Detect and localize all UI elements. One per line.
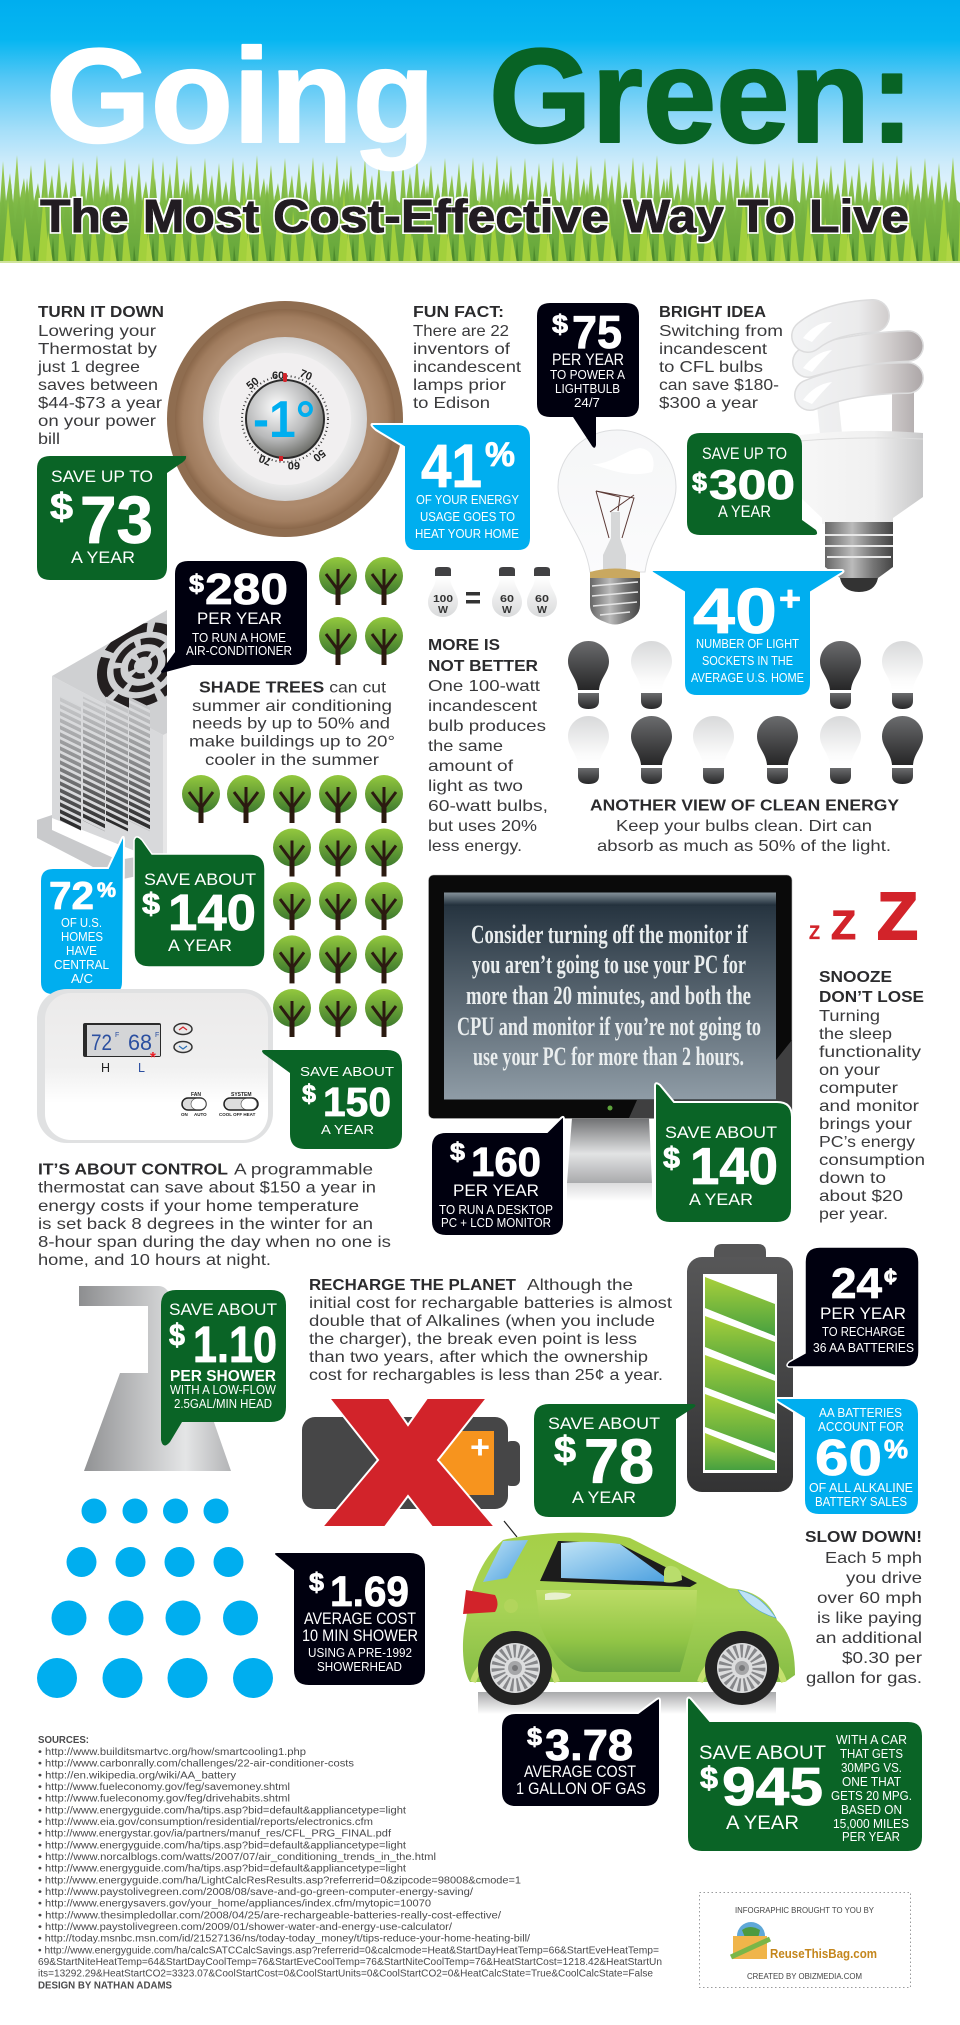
callout: $1.69 average cost of 10 min shower: AVERAGE COST	[304, 1610, 416, 1628]
panel: more is not better: MORE IS	[428, 637, 500, 654]
icon: shower water drops	[37, 1498, 273, 1698]
callout: 72% of US homes have central AC: HAVE	[66, 944, 97, 958]
callout: save about $945: A YEAR	[726, 1813, 799, 1834]
callout: save about $150: 150	[323, 1079, 391, 1125]
icon: programmable wall thermostat	[37, 989, 273, 1143]
callout: 72% of US homes have central AC: A/C	[71, 972, 93, 986]
fan grille	[97, 622, 167, 708]
panel: slow down: SLOW DOWN!	[805, 1529, 922, 1546]
logo: reuse this bag: ReuseThisBag.com	[770, 1946, 877, 1961]
callout: save up to $300: 300	[709, 461, 795, 508]
callout: $160 per year for desktop: TO RUN A DESKTOP	[439, 1203, 553, 1217]
panel: snooze don't lose: down to	[819, 1170, 886, 1187]
car comparison note: ONE THAT	[842, 1775, 901, 1789]
thermostat display	[83, 1023, 161, 1075]
callout: $1.69 average cost of 10 min shower	[275, 1553, 425, 1685]
panel: snooze don't lose: computer	[819, 1080, 899, 1097]
callout: 40+ light sockets: SOCKETS IN THE	[702, 654, 793, 668]
callout: 24 cents per year	[787, 1247, 919, 1367]
panel: more is not better: One 100-watt	[428, 678, 541, 695]
callout: 24 cents per year: 24	[831, 1260, 882, 1308]
callout: $3.78 average cost of gas	[501, 1698, 660, 1807]
callout: $75 per year per lightbulb: $	[552, 309, 569, 339]
panel: it's about control: home, and 10 hours at night.	[38, 1252, 271, 1269]
panel: recharge the planet: RECHARGE THE PLANET	[309, 1277, 517, 1294]
panel: snooze don't lose: on your	[819, 1062, 881, 1079]
callout: save about $140 on monitor: SAVE ABOUT	[665, 1124, 777, 1142]
panel: shade trees	[189, 680, 395, 769]
car comparison note: GETS 20 MPG.	[831, 1789, 912, 1803]
panel: snooze don't lose: PC’s energy	[819, 1134, 915, 1151]
panel: slow down: $0.30 per	[842, 1650, 923, 1667]
panel: more is not better: amount of	[428, 758, 514, 775]
callout: save up to $73	[37, 456, 186, 580]
callout: 40+ light sockets: +	[779, 580, 801, 618]
callout: $3.78 average cost of gas: 3.78	[545, 1721, 633, 1770]
sources list: • http://www.energysavers.gov/your_home/appliances/index.cfm/mytopic=10070	[38, 1899, 431, 1910]
panel: recharge the planet: cost for rechargables is less than 25¢ a year.	[309, 1367, 663, 1384]
callout: $280 per year to run AC: PER YEAR	[197, 610, 282, 628]
switches: COOL OFF HEAT	[219, 1112, 256, 1117]
panel: turn it down	[37, 304, 164, 448]
monitor message: use your PC for more than 2 hours.	[473, 1042, 744, 1071]
icon: CFL bulb	[800, 316, 923, 592]
callout: $1.69 average cost of 10 min shower: SHOWERHEAD	[317, 1660, 402, 1674]
panel: it's about control	[38, 1162, 391, 1269]
panel: more is not better: but uses 20%	[428, 818, 537, 835]
panel: shade trees: needs by up to 50% and	[192, 716, 390, 732]
callout: 24 cents per year: ¢	[884, 1264, 897, 1289]
sources list: • http://www.paystolivegreen.com/2008/08/save-and-go-green-computer-energy-saving/	[38, 1887, 473, 1898]
icon: green car	[463, 1521, 795, 1714]
panel: snooze don't lose: Turning	[819, 1008, 880, 1025]
switches: AUTO	[194, 1112, 207, 1117]
monitor message: more than 20 minutes, and both the	[466, 981, 751, 1010]
callout: save up to $73: $	[50, 486, 73, 527]
panel: bright idea: can save $180-	[659, 377, 779, 394]
callout: save about $140 with shade: A YEAR	[168, 937, 232, 955]
panel: snooze don't lose: per year.	[819, 1206, 888, 1223]
callout: $1.69 average cost of 10 min shower: USING A PRE-1992	[308, 1646, 412, 1660]
thermostat display: H	[101, 1061, 110, 1075]
logo: reuse this bag	[731, 1922, 877, 1961]
callout: $75 per year per lightbulb: LIGHTBULB	[555, 382, 620, 396]
thermostat display: 72	[91, 1030, 112, 1055]
icon: grid of shade trees	[182, 775, 403, 1037]
car comparison note: BASED ON	[841, 1803, 902, 1817]
callout: save about $140 on monitor: A YEAR	[689, 1191, 753, 1209]
panel: more is not better: 60-watt bulbs,	[428, 798, 548, 815]
panel: another view of clean energy: Keep your bulbs clean. Dirt can	[616, 818, 872, 835]
heading: turn it down: TURN IT DOWN	[38, 304, 164, 321]
icon: two rows of trees	[319, 557, 403, 665]
thermostat display: L	[138, 1061, 145, 1075]
sources list: • http://www.energyguide.com/ha/tips.asp?bid=default&appliancetype=light	[38, 1805, 406, 1816]
panel: recharge the planet: Although the	[527, 1277, 633, 1294]
callout: save about $140 with shade: 140	[168, 884, 256, 941]
panel: more is not better: bulb produces	[428, 718, 546, 735]
panel: fun fact: There are 22	[413, 323, 509, 340]
callout: 24 cents per year: TO RECHARGE	[822, 1325, 905, 1339]
panel: more is not better: light as two	[428, 778, 523, 795]
panel: more is not better: the same	[428, 738, 503, 755]
icon: round thermostat dial: 60	[272, 370, 284, 382]
text block: thermostat tip: bill	[38, 431, 60, 448]
callout: save about $1.10 per shower: 1.10	[193, 1316, 277, 1373]
callout: AA batteries 60% of alkaline sales: AA BATTERIES	[819, 1406, 902, 1420]
panel: another view of clean energy: absorb as much as 50% of the light.	[597, 838, 891, 855]
callout: $280 per year to run AC: TO RUN A HOME	[192, 631, 286, 645]
callout: save about $140 with shade: SAVE ABOUT	[144, 871, 256, 889]
callout: save about $945: $	[700, 1760, 718, 1795]
panel: slow down	[805, 1529, 923, 1687]
callout: $1.69 average cost of 10 min shower: $	[309, 1567, 325, 1597]
panel: slow down: Each 5 mph	[825, 1550, 922, 1567]
callout: 72% of US homes have central AC	[40, 837, 124, 995]
callout: save up to $300: $	[692, 467, 708, 497]
icon: crossed-out alkaline battery: +	[470, 1429, 490, 1465]
icon: incandescent light bulb	[558, 430, 676, 624]
callout: save about $78	[534, 1404, 696, 1517]
title: Green:	[489, 22, 914, 171]
panel: recharge the planet: initial cost for rechargable batteries is almost	[309, 1295, 673, 1312]
panel: recharge the planet: double that of Alkalines (when you include	[309, 1313, 655, 1330]
callout: save about $1.10 per shower	[161, 1290, 286, 1446]
panel: snooze don't lose: the sleep	[819, 1026, 892, 1043]
icon: round thermostat dial: 60	[288, 459, 300, 471]
callout: save about $78: SAVE ABOUT	[548, 1415, 660, 1433]
icon: 100W equals two 60W bulbs: 60	[535, 593, 549, 605]
header banner	[0, 0, 960, 263]
panel: it's about control: 8-hour span during the day when no one is	[38, 1234, 391, 1251]
sources list: • http://www.norcalblogs.com/watts/2007/07/air_conditioning_trends_in_the.html	[38, 1852, 436, 1863]
callout: AA batteries 60% of alkaline sales: %	[884, 1434, 908, 1464]
icon: 100W equals two 60W bulbs	[428, 567, 557, 617]
callout: save about $1.10 per shower: 2.5GAL/MIN HEAD	[174, 1397, 272, 1411]
callout: $3.78 average cost of gas: $	[527, 1723, 542, 1751]
callout: $160 per year for desktop: $	[450, 1138, 465, 1166]
icon: 100W equals two 60W bulbs: W	[502, 604, 512, 616]
panel: snooze don't lose: functionality	[819, 1044, 921, 1061]
sources list: • http://www.builditsmartvc.org/how/smartcooling1.php	[38, 1747, 306, 1758]
icon: 100W equals two 60W bulbs: 60	[500, 593, 514, 605]
callout: 40+ light sockets: AVERAGE U.S. HOME	[691, 671, 804, 685]
callout: save about $150: A YEAR	[321, 1123, 374, 1137]
callout: save about $945: SAVE ABOUT	[699, 1743, 826, 1764]
callout: save about $150: $	[302, 1080, 316, 1108]
callout: $160 per year for desktop: 160	[471, 1139, 541, 1185]
callout: save up to $300	[687, 433, 817, 535]
icon: round thermostat dial	[167, 301, 403, 537]
icon: 100W equals two 60W bulbs: W	[537, 604, 547, 616]
callout: save about $1.10 per shower: SAVE ABOUT	[169, 1301, 277, 1319]
sources list: • http://www.thesimpledollar.com/2008/04/25/are-rechargeable-batteries-really-cost-effective/	[38, 1910, 501, 1921]
panel: snooze don't lose: brings your	[819, 1116, 913, 1133]
callout: save up to $73: SAVE UP TO	[51, 468, 153, 486]
callout: $160 per year for desktop	[431, 1117, 564, 1236]
panel: bright idea: BRIGHT IDEA	[659, 304, 766, 321]
panel: recharge the planet: than two years, after which the ownership	[309, 1349, 648, 1366]
panel: shade trees: cooler in the summer	[205, 752, 380, 769]
subtitle: The Most Cost-Effective Way To Live	[40, 190, 909, 242]
callout: save up to $300: A YEAR	[718, 503, 771, 521]
callout: $3.78 average cost of gas: AVERAGE COST	[524, 1763, 636, 1781]
panel: slow down: over 60 mph	[817, 1590, 922, 1607]
callout: AA batteries 60% of alkaline sales: OF ALL ALKALINE	[809, 1481, 913, 1495]
panel: snooze don't lose: about $20	[819, 1188, 903, 1205]
callout: $280 per year to run AC: $	[189, 570, 204, 598]
panel: bright idea	[659, 304, 783, 412]
callout: save about $150: SAVE ABOUT	[300, 1065, 394, 1079]
sources list: • http://www.paystolivegreen.com/2009/01/shower-water-and-energy-use-calculator/	[38, 1922, 452, 1933]
callout: save about $1.10 per shower: WITH A LOW-FLOW	[170, 1383, 276, 1397]
panel: snooze don't lose: SNOOZE	[819, 969, 892, 986]
callout: $1.69 average cost of 10 min shower: 1.69	[330, 1568, 409, 1616]
icon: computer monitor	[428, 875, 792, 1201]
thermostat display: F	[155, 1032, 159, 1039]
panel: fun fact	[413, 304, 522, 412]
monitor message: you aren’t going to use your PC for	[472, 950, 746, 979]
thermostat display: 68	[128, 1030, 152, 1055]
icon: shower head	[79, 1286, 231, 1471]
icon: sleeping z z z: Z	[877, 879, 918, 954]
panel: bright idea: incandescent	[659, 341, 768, 358]
callout: save about $1.10 per shower: $	[169, 1317, 185, 1352]
icon: sleeping z z z	[809, 879, 918, 954]
switches: FAN	[191, 1092, 201, 1098]
panel: it's about control: energy costs if your home temperature	[38, 1198, 359, 1215]
callout: $1.69 average cost of 10 min shower: 10 MIN SHOWER	[302, 1627, 418, 1645]
sponsor box: CREATED BY OBIZMEDIA.COM	[747, 1971, 862, 1981]
text block: thermostat tip: Thermostat by	[38, 341, 157, 358]
panel: it's about control: IT’S ABOUT CONTROL	[38, 1162, 228, 1178]
panel: bright idea: Switching from	[659, 323, 783, 340]
icon: sleeping z z z: Z	[831, 902, 856, 948]
panel: snooze don't lose: and monitor	[819, 1098, 920, 1115]
callout: save about $945	[687, 1698, 923, 1852]
sources list: 69&StartNiteHeatTemp=64&StartDayCoolTemp=76&StartEveCoolTemp=76&StartNiteCoolTemp=76&HeatStartCost=1218.42&HeatStartUn	[38, 1957, 662, 1968]
vents	[60, 663, 150, 864]
panel: it's about control: is set back 8 degrees in the winter for an	[38, 1216, 373, 1233]
callout: 41% of energy heats home: %	[485, 436, 515, 474]
text block: thermostat tip: Lowering your	[38, 323, 157, 340]
switches: SYSTEM	[231, 1092, 252, 1098]
panel: snooze don't lose	[819, 969, 925, 1223]
icon: 100W equals two 60W bulbs: 100	[433, 593, 453, 605]
panel: more is not better: less energy.	[428, 838, 522, 855]
thermostat display: F	[115, 1032, 119, 1039]
sources list: • http://www.energyguide.com/ha/calcSATCCalcSavings.asp?referrerid=0&calcmode=Heat&StartDayHeatTemp=66&StartEveHeatTemp=	[38, 1945, 659, 1956]
panel: bright idea: to CFL bulbs	[659, 359, 763, 376]
sources list: • http://www.eia.gov/consumption/residential/reports/electronics.cfm	[38, 1817, 373, 1828]
car comparison note: PER YEAR	[842, 1830, 900, 1844]
text block: thermostat tip: on your power	[38, 413, 157, 430]
car comparison note: 15,000 MILES	[833, 1817, 909, 1831]
callout: AA batteries 60% of alkaline sales: 60	[815, 1429, 882, 1486]
panel: another view of clean energy	[590, 798, 900, 855]
panel: more is not better: incandescent	[428, 698, 538, 715]
callout: 41% of energy heats home: USAGE GOES TO	[420, 510, 515, 524]
callout: save about $1.10 per shower: PER SHOWER	[170, 1368, 276, 1385]
panel: recharge the planet: the charger), the break even point is less	[309, 1331, 637, 1348]
callout: AA batteries 60% of alkaline sales	[776, 1398, 919, 1515]
switches: ON	[181, 1112, 188, 1117]
sources list: • http://www.fueleconomy.gov/feg/drivehabits.shtml	[38, 1794, 290, 1805]
callout: 24 cents per year: 36 AA BATTERIES	[813, 1341, 914, 1355]
callout: $75 per year per lightbulb: 75	[572, 306, 622, 358]
callout: 41% of energy heats home: OF YOUR ENERGY	[416, 493, 520, 507]
car comparison note	[831, 1733, 912, 1844]
callout: save about $140 with shade	[134, 837, 265, 967]
callout: 24 cents per year: PER YEAR	[820, 1305, 906, 1323]
panel: fun fact: to Edison	[413, 395, 490, 412]
sources list: • http://www.fueleconomy.gov/feg/savemoney.shtml	[38, 1782, 290, 1793]
panel: it's about control: thermostat can save about $150 a year in	[38, 1180, 376, 1196]
callout: AA batteries 60% of alkaline sales: BATTERY SALES	[815, 1495, 907, 1509]
callout: AA batteries 60% of alkaline sales: ACCOUNT FOR	[818, 1420, 904, 1434]
text block: thermostat tip: $44-$73 a year	[38, 395, 163, 412]
panel: shade trees: SHADE TREES can cut	[199, 680, 387, 696]
text block: thermostat tip: saves between	[38, 377, 158, 394]
panel: slow down: an additional	[816, 1630, 922, 1647]
panel: snooze don't lose: DON’T LOSE	[819, 989, 924, 1006]
icon: round thermostat dial: 70	[298, 368, 314, 383]
title	[46, 22, 914, 171]
callout: 41% of energy heats home: HEAT YOUR HOME	[415, 527, 519, 541]
callout: save about $140 with shade: $	[142, 888, 160, 921]
switches	[181, 1092, 258, 1117]
panel: recharge the planet	[309, 1277, 673, 1384]
sources list: DESIGN BY NATHAN ADAMS	[38, 1980, 172, 1991]
callout: $75 per year per lightbulb	[537, 303, 639, 448]
car comparison note: 30MPG VS.	[841, 1761, 902, 1775]
callout: save up to $300: SAVE UP TO	[702, 445, 787, 463]
callout: 40+ light sockets	[652, 570, 844, 696]
panel: another view of clean energy: ANOTHER VIEW OF CLEAN ENERGY	[590, 798, 900, 814]
callout: $280 per year to run AC: AIR-CONDITIONER	[186, 644, 292, 658]
sponsor box: INFOGRAPHIC BROUGHT TO YOU BY	[735, 1905, 874, 1915]
callout: $160 per year for desktop: PC + LCD MONITOR	[441, 1216, 551, 1230]
callout: 41% of energy heats home: 41	[421, 432, 482, 500]
callout: $280 per year to run AC: 280	[205, 565, 288, 614]
panel: more is not better: NOT BETTER	[428, 658, 538, 675]
icon: air-conditioner unit	[37, 610, 167, 879]
icon: crossed-out alkaline battery	[302, 1398, 520, 1527]
icon: round thermostat dial: 50	[244, 375, 262, 392]
panel: fun fact: inventors of	[413, 341, 511, 358]
callout: 40+ light sockets: NUMBER OF LIGHT	[696, 637, 799, 651]
panel: snooze don't lose: consumption	[819, 1152, 925, 1169]
panel: slow down: you drive	[846, 1570, 922, 1587]
panel: bright idea: $300 a year	[659, 395, 759, 412]
panel: fun fact: FUN FACT:	[413, 304, 504, 321]
icon: round thermostat dial: 70	[257, 452, 273, 467]
callout: 72% of US homes have central AC: CENTRAL	[54, 958, 109, 972]
sources list: • http://www.carbonrally.com/challenges/22-air-conditioner-costs	[38, 1759, 354, 1770]
panel: fun fact: lamps prior	[413, 377, 507, 394]
text block: thermostat tip: just 1 degree	[37, 359, 140, 376]
sources list: • http://www.energystar.gov/ia/partners/manuf_res/CFL_PRG_FINAL.pdf	[38, 1829, 391, 1840]
panel: slow down: gallon for gas.	[806, 1670, 922, 1687]
callout: 41% of energy heats home	[372, 424, 531, 551]
car comparison note: THAT GETS	[840, 1747, 903, 1761]
callout: save up to $73: A YEAR	[71, 549, 135, 567]
callout: save about $140 on monitor: 140	[690, 1138, 778, 1196]
monitor message: CPU and monitor if you’re not going to	[457, 1012, 761, 1041]
callout: save about $945: 945	[722, 1757, 823, 1817]
sources list: • http://www.energyguide.com/ha/tips.asp?bid=default&appliancetype=light	[38, 1864, 406, 1875]
monitor stand	[567, 1118, 652, 1201]
callout: $75 per year per lightbulb: PER YEAR	[552, 351, 624, 369]
thermostat display: *	[150, 1049, 156, 1066]
monitor message: Consider turning off the monitor if	[471, 920, 748, 949]
grass	[0, 153, 960, 263]
callout: 72% of US homes have central AC: 72	[49, 875, 94, 918]
icon: charged battery	[687, 1244, 793, 1492]
sources list: • http://www.energyguide.com/ha/tips.asp?bid=default&appliancetype=light	[38, 1840, 406, 1851]
icon: sleeping z z z: Z	[809, 923, 820, 944]
callout: save about $78: A YEAR	[572, 1489, 636, 1507]
callout: 72% of US homes have central AC: %	[97, 879, 116, 902]
callout: save about $150	[262, 1050, 402, 1149]
callout: $75 per year per lightbulb: TO POWER A	[550, 368, 626, 382]
callout: $3.78 average cost of gas: 1 GALLON OF GAS	[516, 1780, 646, 1798]
panel: shade trees: summer air conditioning	[192, 698, 392, 715]
panel: shade trees: make buildings up to 20°	[189, 734, 395, 750]
panel: slow down: is like paying	[817, 1610, 922, 1627]
icon: 100W equals two 60W bulbs: W	[438, 604, 448, 616]
callout: 72% of US homes have central AC: OF U.S.	[61, 916, 102, 930]
panel: it's about control: A programmable	[234, 1162, 373, 1178]
monitor message	[457, 920, 761, 1071]
callout: 72% of US homes have central AC: HOMES	[61, 930, 103, 944]
sponsor box	[700, 1892, 910, 1988]
callout: save about $140 on monitor	[655, 1083, 792, 1223]
sources list: • http://today.msnbc.msn.com/id/21527136/ns/today-today_money/t/tips-reduce-your-home-heating-bill/	[38, 1934, 530, 1945]
sources list	[38, 1735, 662, 1991]
callout: save about $78: 78	[584, 1427, 654, 1497]
callout: $160 per year for desktop: PER YEAR	[453, 1182, 539, 1200]
callout: $75 per year per lightbulb: 24/7	[574, 396, 600, 410]
callout: $280 per year to run AC	[161, 561, 307, 673]
icon: round thermostat dial: -1°	[253, 391, 315, 449]
icon: round thermostat dial: 50	[310, 447, 328, 464]
car comparison note: WITH A CAR	[836, 1733, 907, 1747]
sources list: SOURCES:	[38, 1735, 89, 1746]
callout: save about $140 on monitor: $	[663, 1142, 680, 1175]
sources list: • http://www.energyguide.com/ha/LightCalcResResults.asp?referrerid=0&zipcode=98008&cmode=1	[38, 1875, 521, 1886]
callout: save up to $73: 73	[80, 483, 153, 558]
title: Going	[46, 22, 435, 171]
sources list: • http://en.wikipedia.org/wiki/AA_battery	[38, 1770, 236, 1781]
sources list: its=13292.29&HeatStartCO2=3323.07&CoolStartCost=0&CoolStartUnits=0&CoolStartCO2=0&HeatCalcState=True&CoolCalcState=False	[38, 1969, 653, 1980]
panel: fun fact: incandescent	[413, 359, 522, 376]
text block: thermostat tip	[37, 323, 163, 448]
callout: 40+ light sockets: 40	[693, 575, 777, 647]
panel: more is not better	[428, 637, 548, 855]
icon: grid of dark and light bulbs	[568, 641, 923, 784]
callout: save about $78: $	[554, 1429, 576, 1470]
